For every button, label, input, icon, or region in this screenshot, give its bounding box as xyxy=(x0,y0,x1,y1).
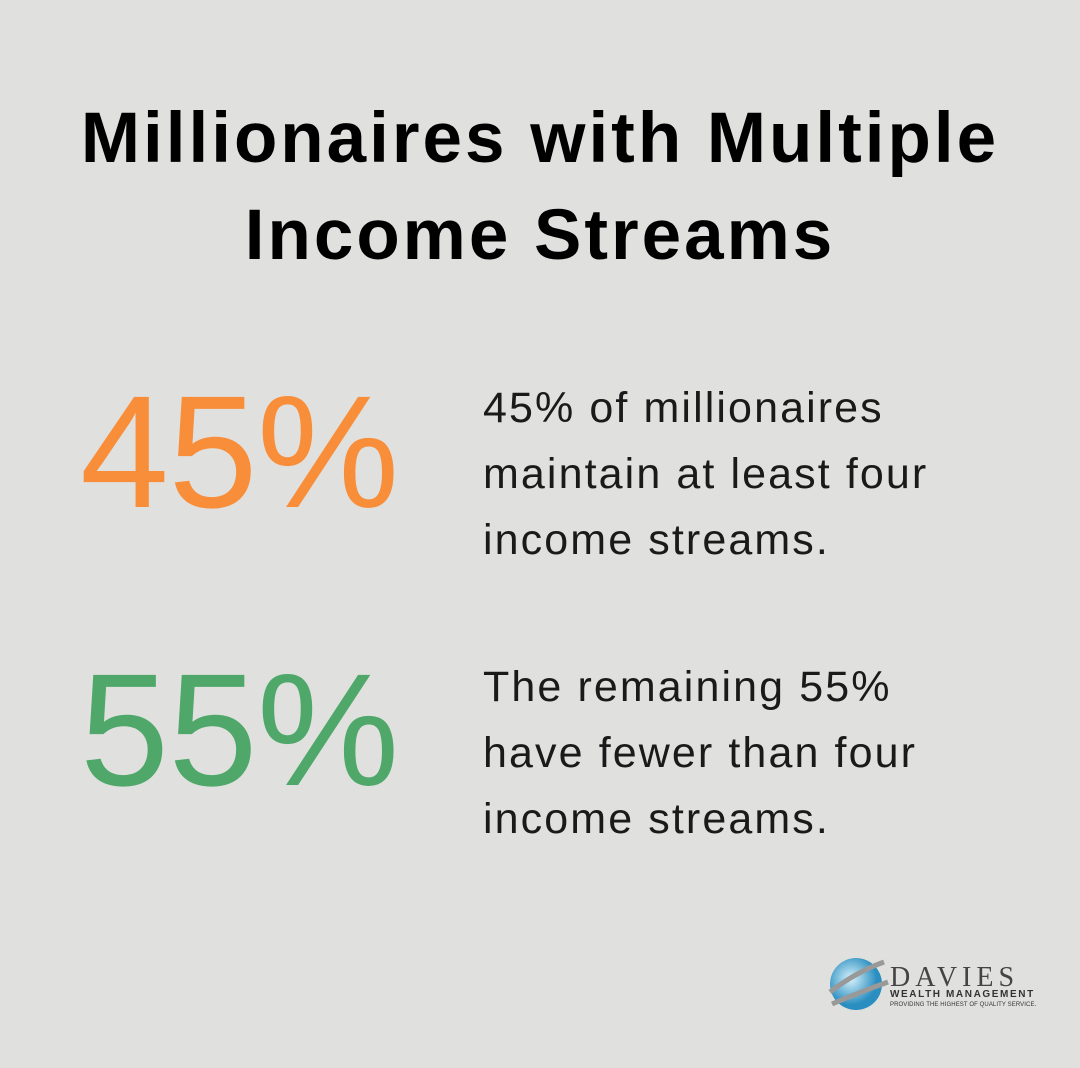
text: 55% description: income streams. xyxy=(483,795,830,843)
text: 55% description xyxy=(483,663,917,843)
logo: Davies Wealth Management xyxy=(828,958,1036,1010)
logo text: DAVIES xyxy=(890,962,1019,993)
text: 45% description xyxy=(483,384,928,564)
logo: Davies Wealth Management: PROVIDING THE HIGHEST OF QUALITY SERVICE. xyxy=(890,1002,1036,1008)
text: 45% description: 45% of millionaires xyxy=(483,384,884,432)
title xyxy=(81,99,999,275)
stat: 55%: 55% xyxy=(80,640,399,819)
text: 55% description: The remaining 55% xyxy=(483,663,892,711)
text: 45% description: maintain at least four xyxy=(483,450,928,498)
icon: globe xyxy=(828,958,889,1010)
title: Income Streams xyxy=(245,196,835,275)
title: Millionaires with Multiple xyxy=(81,99,999,178)
stat: 45%: 45% xyxy=(80,362,399,541)
logo: Davies Wealth Management: WEALTH MANAGEMENT xyxy=(890,989,1035,1000)
text: 45% description: income streams. xyxy=(483,516,830,564)
text: 55% description: have fewer than four xyxy=(483,729,917,777)
